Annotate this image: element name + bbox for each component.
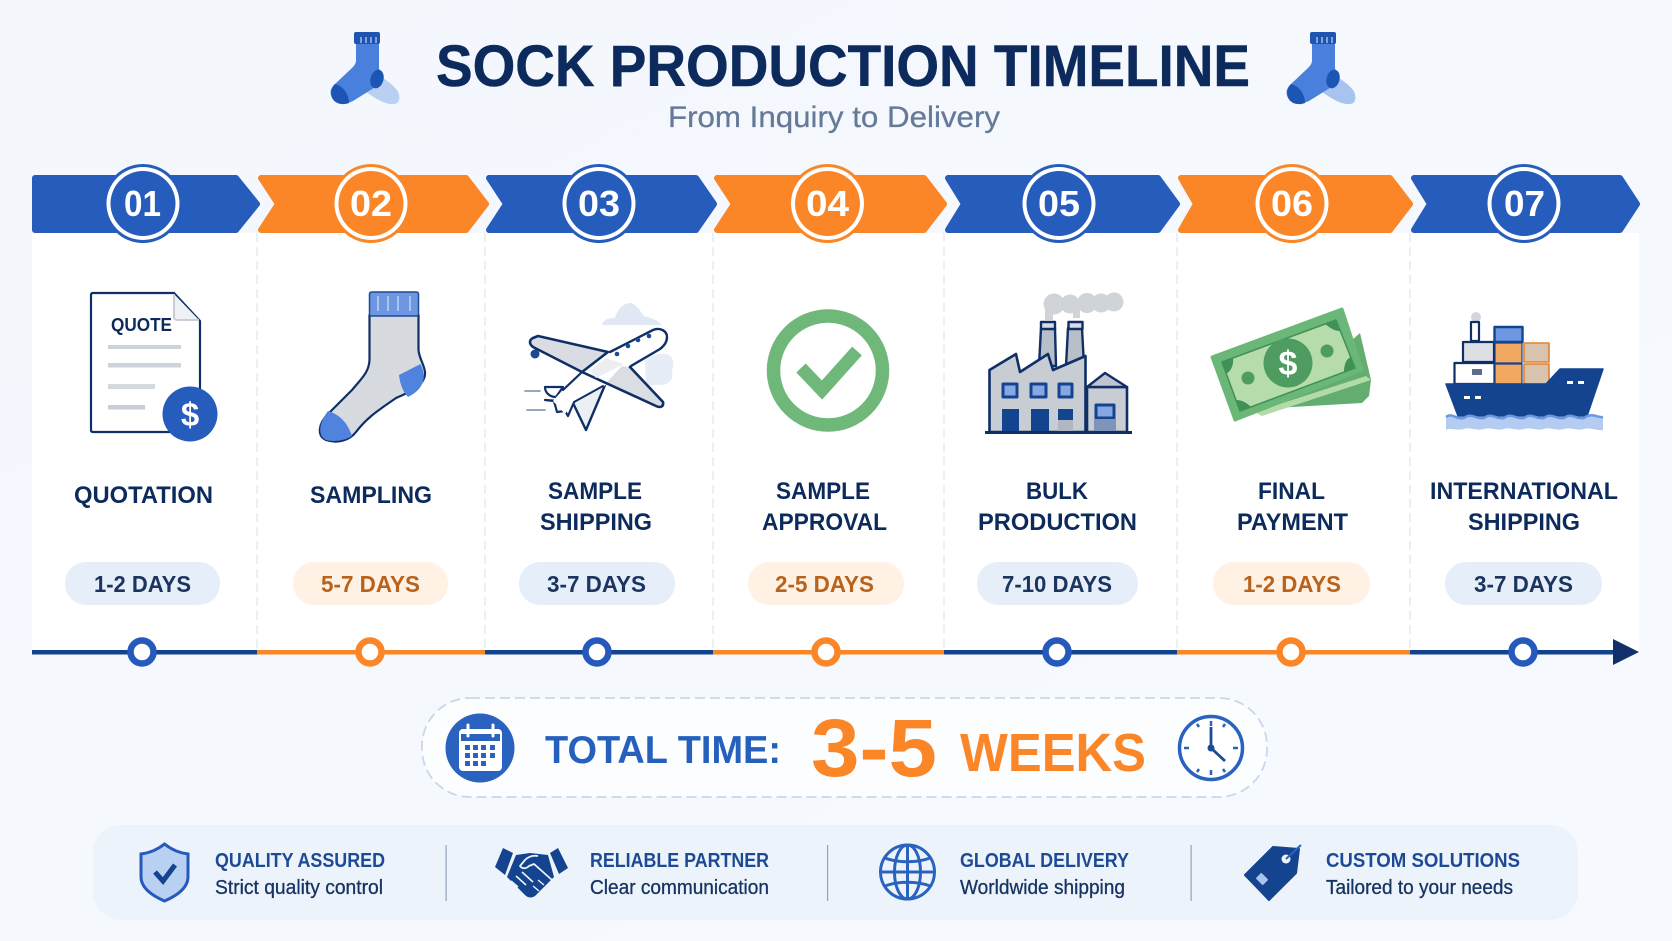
icon: banknotes: $: [1279, 345, 1298, 383]
number badge 06: 06: [1271, 183, 1313, 224]
timeline node: [814, 640, 838, 664]
number badge 05: [1020, 164, 1098, 243]
icon: container ship: [1446, 312, 1603, 430]
duration pill: [1445, 562, 1602, 605]
timeline node: [130, 640, 154, 664]
text: custom solutions: [1326, 849, 1520, 899]
chevron 01: [35, 178, 257, 230]
number badge 07: [1484, 164, 1564, 243]
chevron 04: [717, 178, 944, 230]
panel: step 03 sample shipping: [485, 164, 714, 664]
icon: globe: [880, 845, 934, 899]
icon: right socks: [1287, 32, 1355, 104]
icon: quote document: [91, 293, 218, 442]
panel: step 02 sampling: [257, 164, 486, 664]
label: sample approval: [762, 478, 887, 536]
panel: step 07 international shipping: [1410, 164, 1639, 665]
number badge 03: [560, 164, 638, 243]
text: global delivery: Worldwide shipping: [960, 877, 1125, 899]
icon: quote document: $: [181, 396, 199, 433]
title: SOCK PRODUCTION TIMELINE: [436, 34, 1250, 99]
panel: step 04 sample approval: [713, 164, 944, 664]
icon: quote document: QUOTE: [111, 315, 172, 335]
duration pill: 1-2 DAYS: [1243, 571, 1341, 597]
chevron 05: [948, 178, 1177, 230]
duration pill: [748, 562, 904, 605]
icon: price tag: [1245, 845, 1301, 900]
panel: step 01 quotation: [32, 164, 257, 664]
label: international shipping: [1430, 478, 1618, 536]
duration pill: [293, 562, 448, 605]
icon: banknotes: [1212, 309, 1371, 420]
label: sample approval: SAMPLE: [776, 478, 870, 505]
label: final payment: PAYMENT: [1237, 509, 1348, 536]
icon: green check ring: [774, 316, 882, 425]
timeline node: [1512, 640, 1534, 664]
icon: grey sock: [320, 292, 425, 442]
panel: step 06 final payment: [1177, 164, 1410, 664]
text: global delivery: GLOBAL DELIVERY: [960, 849, 1129, 872]
icon: airplane: [525, 303, 673, 430]
number badge 05: 05: [1038, 183, 1080, 224]
text: quality assured: QUALITY ASSURED: [215, 849, 385, 872]
header: [331, 32, 1355, 134]
label: bulk production: PRODUCTION: [978, 509, 1137, 536]
timeline node: [1046, 640, 1068, 664]
duration pill: 5-7 DAYS: [321, 571, 420, 597]
number badge 07: 07: [1504, 183, 1545, 224]
label: bulk production: [978, 478, 1137, 536]
duration pill: [1213, 562, 1370, 605]
chevron 07: [1414, 178, 1637, 230]
duration pill: 3-7 DAYS: [547, 571, 646, 597]
icon: factory: [985, 292, 1132, 434]
number badge 02: 02: [350, 183, 392, 224]
number badge 01: [104, 164, 182, 243]
duration pill: [65, 562, 220, 605]
label: final payment: FINAL: [1258, 478, 1325, 505]
icon: left socks: [331, 32, 399, 104]
label: sample shipping: [540, 478, 652, 536]
label: international shipping: SHIPPING: [1468, 509, 1580, 536]
label: sample approval: APPROVAL: [762, 509, 887, 536]
label: sample shipping: SHIPPING: [540, 509, 652, 536]
number badge 04: 04: [806, 183, 849, 224]
duration pill: 1-2 DAYS: [94, 571, 191, 597]
number badge 02: [332, 164, 410, 243]
label: bulk production: BULK: [1026, 478, 1088, 505]
number badge 01: 01: [124, 183, 161, 224]
label: final payment: [1237, 478, 1348, 536]
panel: step 05 bulk production: [944, 164, 1177, 664]
timeline node: [358, 640, 382, 664]
text: weeks: WEEKS: [960, 723, 1146, 783]
timeline node: [586, 640, 608, 664]
panel: benefits strip: [93, 825, 1578, 920]
label: sampling: SAMPLING: [310, 482, 432, 509]
chevron 06: [1181, 178, 1410, 230]
text: total time: TOTAL TIME:: [545, 729, 781, 772]
icon: handshake: [495, 848, 568, 898]
label: international shipping: INTERNATIONAL: [1430, 478, 1618, 505]
text: custom solutions: Tailored to your needs: [1326, 877, 1513, 899]
duration pill: 2-5 DAYS: [775, 571, 874, 597]
number badge 04: [788, 164, 867, 243]
text: reliable partner: RELIABLE PARTNER: [590, 849, 769, 872]
text: global delivery: [960, 849, 1129, 899]
icon: calendar: [446, 714, 514, 782]
chevron 02: [261, 178, 486, 230]
duration pill: 7-10 DAYS: [1002, 571, 1112, 597]
text: 3-5: 3-5: [811, 703, 937, 794]
text: quality assured: [215, 849, 385, 899]
duration pill: [519, 562, 675, 605]
label: quotation: QUOTATION: [74, 482, 213, 509]
number badge 06: [1252, 164, 1332, 243]
subtitle: From Inquiry to Delivery: [668, 101, 1000, 134]
callout: total time: [422, 698, 1267, 797]
text: quality assured: Strict quality control: [215, 877, 383, 899]
label: sample shipping: SAMPLE: [548, 478, 642, 505]
text: reliable partner: Clear communication: [590, 877, 769, 899]
duration pill: 3-7 DAYS: [1474, 571, 1573, 597]
duration pill: [977, 562, 1138, 605]
timeline node: [1280, 640, 1302, 664]
icon: shield: [141, 844, 188, 901]
chevron 03: [489, 178, 714, 230]
text: custom solutions: CUSTOM SOLUTIONS: [1326, 849, 1520, 872]
text: reliable partner: [590, 849, 769, 899]
number badge 03: 03: [578, 183, 620, 224]
icon: clock: [1180, 716, 1242, 780]
arrow head: [1613, 639, 1639, 665]
